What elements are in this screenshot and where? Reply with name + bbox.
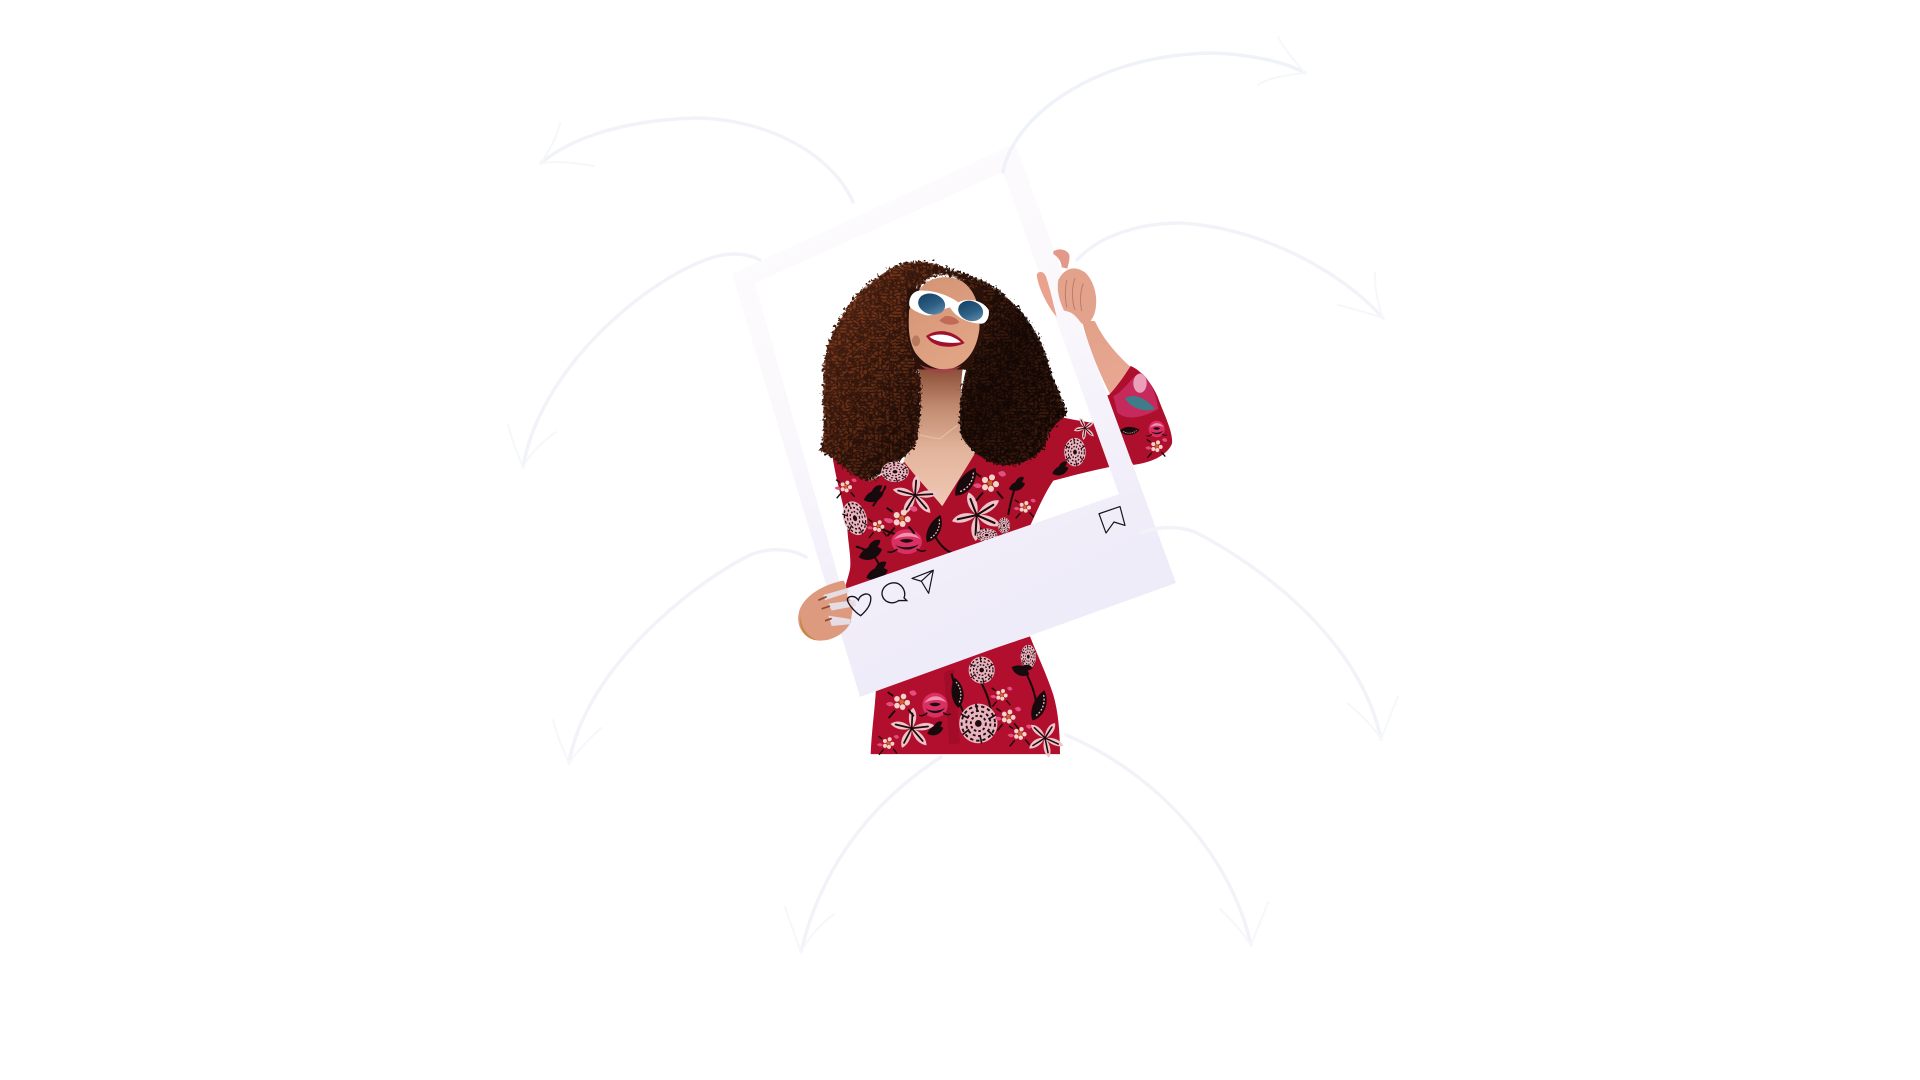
- dress floral print: [835, 412, 1100, 765]
- icon: bookmark: [1099, 507, 1125, 533]
- arrow: up-left from frame: [541, 118, 853, 202]
- nose: [939, 316, 959, 325]
- icon: heart: [847, 594, 871, 616]
- arrow: bottom right: [1066, 735, 1268, 945]
- icon: share plane: [912, 570, 933, 593]
- post frame: [732, 143, 1176, 697]
- hair: [820, 261, 1066, 481]
- arrow: left upper: [508, 254, 760, 467]
- upper sleeve: [1093, 366, 1172, 465]
- arrow: up-right from frame: [1003, 37, 1305, 172]
- chest and neck: [903, 364, 977, 506]
- dress sash: [944, 669, 960, 745]
- icon: comment bubble: [882, 583, 907, 603]
- upper hand: [1037, 249, 1096, 324]
- sunglasses: [909, 290, 989, 324]
- woman holding the post frame: [732, 143, 1176, 765]
- arrow: right lower: [1141, 528, 1398, 739]
- arrow: right upper: [1077, 223, 1383, 318]
- dress skirt: [871, 636, 1060, 754]
- arrow: left lower: [553, 550, 806, 763]
- dress upper body: [832, 415, 1110, 592]
- raised arm: [1082, 320, 1131, 395]
- arrow: bottom left: [785, 757, 941, 952]
- necklace: [920, 426, 957, 439]
- face: [909, 277, 980, 373]
- mouth: [926, 331, 965, 347]
- lower hand: [798, 581, 856, 641]
